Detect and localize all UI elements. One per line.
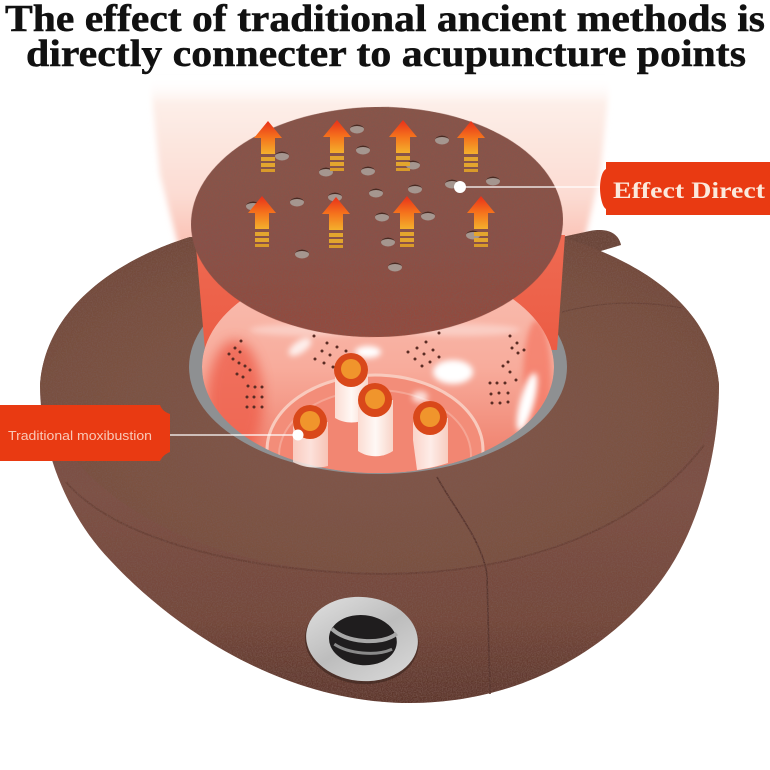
loop tab bbox=[548, 230, 621, 259]
callout: effect direct leader bbox=[454, 181, 605, 193]
callout: Traditional moxibustion bbox=[0, 405, 170, 461]
lid vent holes bbox=[246, 124, 500, 272]
metal port bbox=[301, 591, 423, 690]
callout: Effect Direct bbox=[600, 162, 770, 215]
moxa stick: left bbox=[293, 405, 328, 468]
cushion ring bbox=[40, 237, 719, 703]
title: directly connecter to acupuncture points bbox=[26, 33, 746, 75]
perforation dots bbox=[228, 332, 526, 408]
callout: Effect Direct: Effect Direct bbox=[613, 178, 765, 203]
lid bbox=[189, 104, 565, 340]
moxa stick: centre bbox=[358, 383, 393, 456]
metal rim of opening bbox=[189, 260, 567, 474]
title bbox=[5, 0, 765, 75]
light beam bbox=[150, 78, 610, 290]
heat arrows bbox=[248, 120, 495, 248]
bowl highlights bbox=[250, 324, 542, 433]
inner bowl bbox=[202, 299, 554, 473]
callout: moxibustion leader bbox=[165, 430, 304, 440]
moxa stick: top bbox=[334, 353, 368, 422]
callout: Traditional moxibustion: Traditional moxibustion bbox=[8, 429, 152, 443]
red glow column bbox=[195, 235, 565, 350]
moxa stick: right bbox=[413, 401, 448, 470]
